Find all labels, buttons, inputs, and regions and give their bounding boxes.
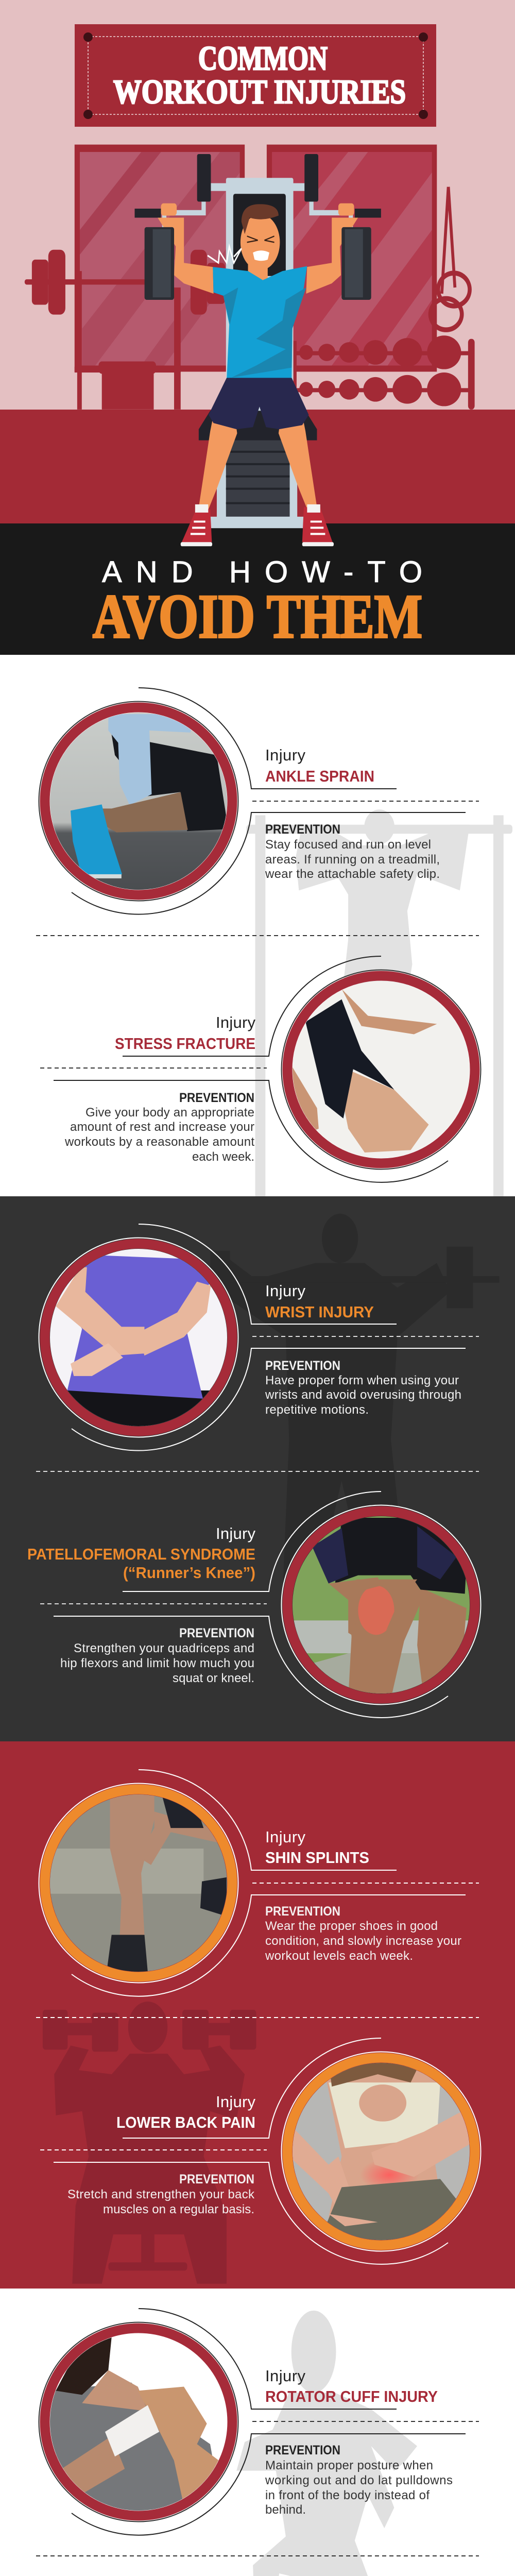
prevention text: condition, and slowly increase your xyxy=(265,1934,461,1948)
panel: section four (white) xyxy=(36,2308,479,2576)
prevention text: PREVENTION xyxy=(179,1626,254,1640)
exercise machine xyxy=(134,154,381,528)
prevention text: PREVENTION xyxy=(265,1359,340,1373)
gym illustration xyxy=(25,145,475,546)
prevention text: workouts by a reasonable amount xyxy=(64,1135,254,1149)
silhouette: dumbbell press xyxy=(43,2002,256,2284)
prevention text xyxy=(265,2443,453,2517)
injury: stress fracture xyxy=(40,956,481,1182)
photo: foot xyxy=(289,981,470,1158)
injury name: PATELLOFEMORAL SYNDROME xyxy=(27,1545,255,1563)
panel: hero xyxy=(0,0,515,655)
prevention text xyxy=(60,1626,254,1685)
prevention text: Have proper form when using your xyxy=(265,1374,459,1387)
injury name: (“Runner’s Knee”) xyxy=(123,1564,255,1582)
panel: section two (dark) xyxy=(0,1196,515,1741)
hero wall background xyxy=(0,0,515,410)
photo: shoulder xyxy=(50,2337,218,2511)
injury: wrist injury xyxy=(39,1224,479,1451)
injury name: LOWER BACK PAIN xyxy=(116,2113,255,2131)
prevention text: repetitive motions. xyxy=(265,1403,369,1417)
prevention text: each week. xyxy=(192,1150,254,1164)
hero black band xyxy=(0,523,515,655)
prevention text: Stretch and strengthen your back xyxy=(67,2188,255,2201)
prevention text: amount of rest and increase your xyxy=(70,1120,254,1134)
ring xyxy=(45,707,232,895)
connector arcs xyxy=(72,2309,466,2535)
panel: section one (white) xyxy=(36,687,512,1196)
prevention text: Strengthen your quadriceps and xyxy=(74,1641,254,1655)
section background xyxy=(0,1196,515,1741)
left window xyxy=(75,145,245,371)
photo: calf xyxy=(49,1779,227,1972)
prevention text xyxy=(64,1091,254,1164)
injury label: Injury xyxy=(265,2367,306,2385)
injury: ankle sprain xyxy=(39,688,479,914)
injury: rotator cuff xyxy=(39,2309,479,2535)
prevention text: areas. If running on a treadmill, xyxy=(265,853,440,867)
injury name: STRESS FRACTURE xyxy=(115,1035,255,1053)
connector arcs xyxy=(54,2038,448,2264)
injury label: Injury xyxy=(216,1013,255,1031)
injury name: ROTATOR CUFF INJURY xyxy=(265,2387,438,2405)
prevention text: squat or kneel. xyxy=(173,1671,254,1685)
ring xyxy=(287,1511,475,1699)
prevention text: PREVENTION xyxy=(179,2172,254,2187)
photo: ankle xyxy=(50,713,228,890)
photo: knee xyxy=(293,1516,470,1693)
title banner xyxy=(75,24,436,127)
connector arcs xyxy=(72,1770,466,1996)
prevention text: PREVENTION xyxy=(265,822,340,837)
connector arcs xyxy=(54,1492,448,1718)
barbell rack and bench silhouette xyxy=(25,250,225,410)
injury label: Injury xyxy=(265,746,306,764)
prevention text: hip flexors and limit how much you xyxy=(60,1656,254,1670)
injury name xyxy=(27,1545,255,1582)
right window xyxy=(267,145,437,371)
dumbbell rack xyxy=(294,335,475,410)
injury name: ANKLE SPRAIN xyxy=(265,767,374,785)
prevention text: in front of the body instead of xyxy=(265,2488,430,2502)
section background xyxy=(0,2289,515,2576)
injury label: Injury xyxy=(265,1828,306,1846)
prevention text: Wear the proper shoes in good xyxy=(265,1919,438,1933)
prevention text: PREVENTION xyxy=(179,1091,254,1105)
injury label: Injury xyxy=(216,2093,255,2111)
section background xyxy=(0,1741,515,2289)
prevention text xyxy=(265,1359,461,1417)
ring xyxy=(45,2328,232,2516)
prevention text: workout levels each week. xyxy=(265,1949,413,1963)
photo: wrist xyxy=(49,1249,227,1436)
prevention text: Maintain proper posture when xyxy=(265,2459,433,2472)
man sitting at machine xyxy=(145,204,371,546)
gymnastic rings xyxy=(431,187,470,330)
prevention text: Give your body an appropriate xyxy=(85,1106,254,1120)
prevention text: Stay focused and run on level xyxy=(265,838,431,852)
ring xyxy=(45,1789,232,1977)
prevention text: wrists and avoid overusing through xyxy=(265,1388,461,1402)
prevention text: PREVENTION xyxy=(265,2443,340,2458)
title text: COMMON xyxy=(198,40,328,77)
connector arcs xyxy=(54,956,448,1182)
subtitle: and how-to: AND HOW-TO xyxy=(102,555,422,589)
ring xyxy=(45,1244,232,1431)
injury name: SHIN SPLINTS xyxy=(265,1849,369,1867)
silhouette: barbell lifter xyxy=(230,1214,473,1584)
prevention text: PREVENTION xyxy=(265,1904,340,1919)
injury: lower back pain xyxy=(40,2038,481,2264)
subtitle: avoid them: AVOID THEM xyxy=(93,582,422,651)
hero floor xyxy=(0,410,515,524)
prevention text xyxy=(265,1904,461,1963)
prevention text: working out and do lat pulldowns xyxy=(265,2473,453,2487)
section background xyxy=(0,655,515,1196)
prevention text: wear the attachable safety clip. xyxy=(265,867,440,881)
title text line 2: WORKOUT INJURIES xyxy=(113,73,406,111)
injury label: Injury xyxy=(216,1524,255,1543)
prevention text xyxy=(67,2172,255,2216)
photo: lower back xyxy=(289,2062,470,2243)
injury label: Injury xyxy=(265,1282,306,1300)
connector arcs xyxy=(72,688,466,914)
injury: patellofemoral syndrome xyxy=(27,1492,481,1719)
silhouette: pull-up xyxy=(246,809,512,1226)
injury: shin splints xyxy=(39,1770,479,1996)
ring xyxy=(287,2058,475,2245)
panel: section three (red) xyxy=(0,1741,515,2289)
injury name: WRIST INJURY xyxy=(265,1303,374,1321)
connector arcs xyxy=(72,1224,466,1451)
prevention text: muscles on a regular basis. xyxy=(103,2202,254,2216)
prevention text xyxy=(265,822,440,881)
silhouette: runner xyxy=(236,2310,417,2576)
ring xyxy=(287,976,475,1163)
prevention text: behind. xyxy=(265,2503,306,2517)
